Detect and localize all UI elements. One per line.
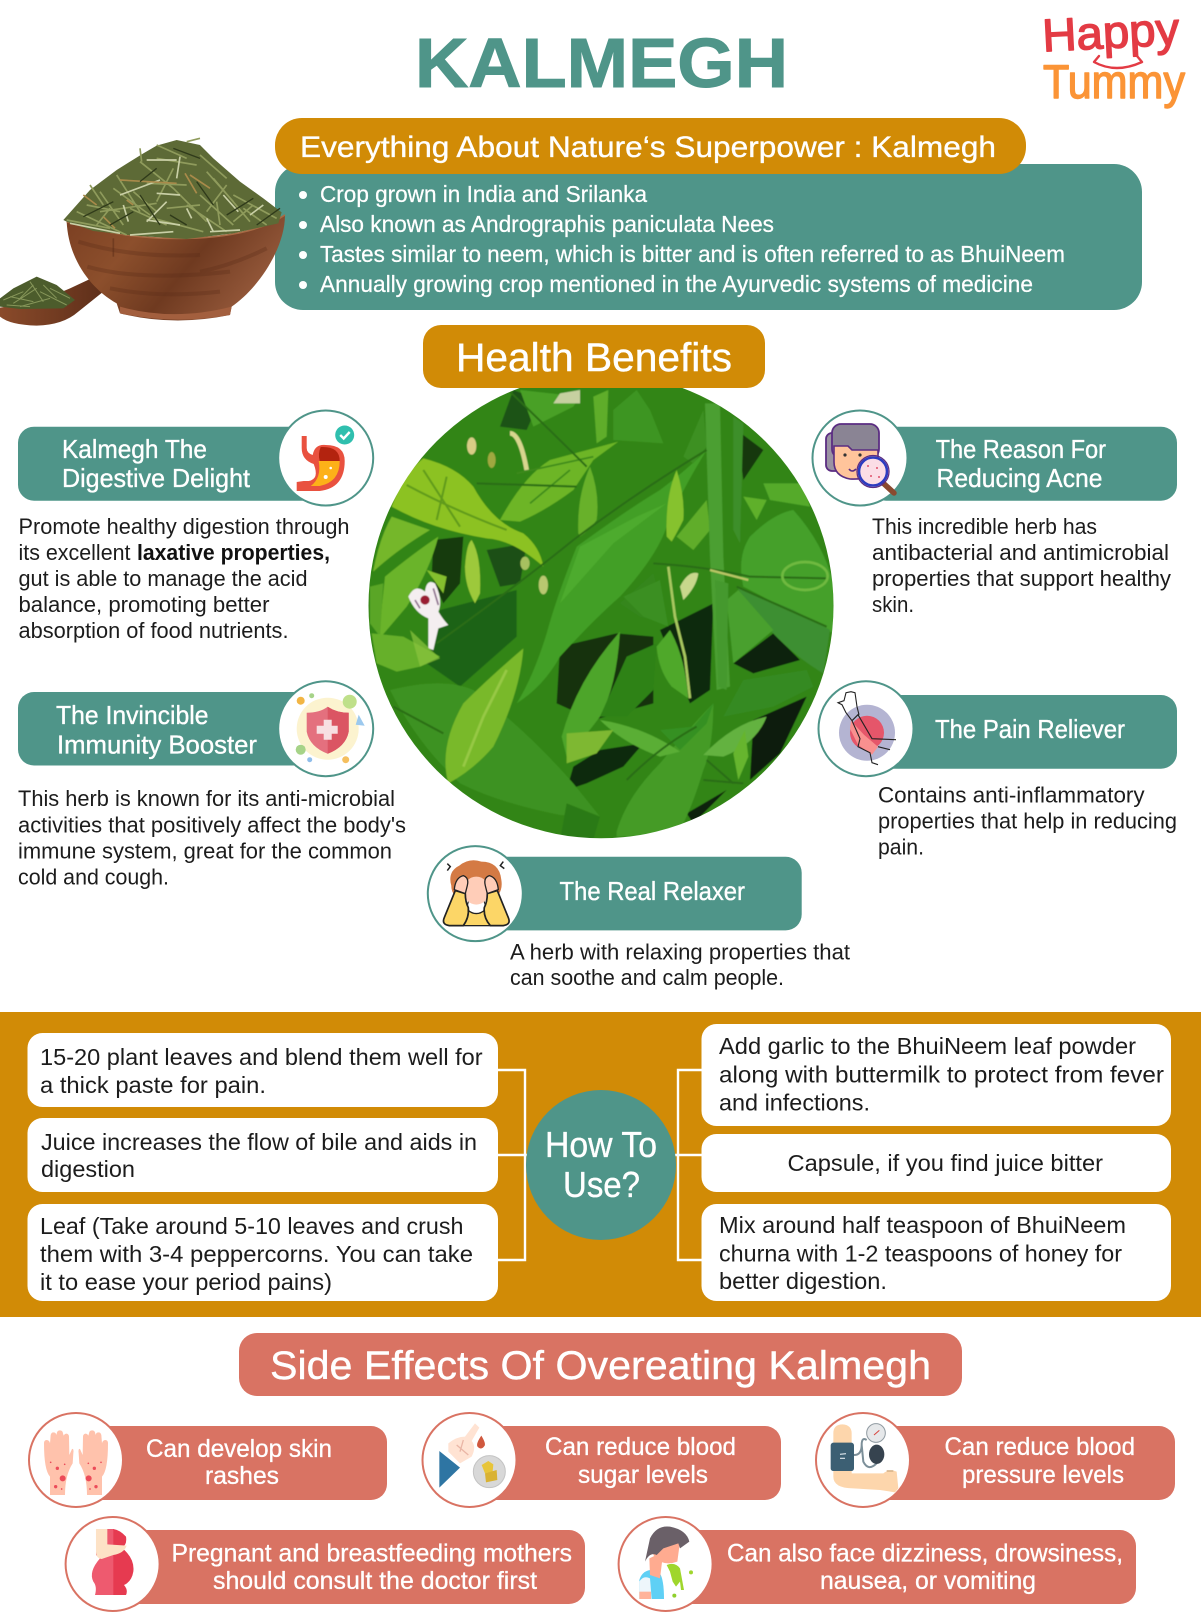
- logo: Happy Tummy: Tummy: [1043, 55, 1185, 108]
- bullet list: Also known as Andrographis paniculata Nees: [320, 211, 774, 237]
- icon: face with magnifier: [826, 424, 894, 493]
- description: properties that help in reducing: [878, 808, 1177, 834]
- description: pain.: [878, 834, 924, 860]
- label: [545, 1433, 736, 1489]
- label: [172, 1540, 572, 1595]
- icon: painful arm: [838, 692, 896, 765]
- label: [727, 1540, 1123, 1595]
- tip: leaf: Leaf (Take around 5-10 leaves and crush: [40, 1213, 464, 1239]
- panel: pregnant mothers: [66, 1517, 585, 1611]
- description: absorption of food nutrients.: [18, 618, 288, 643]
- heading: side effects: Side Effects Of Overeating Kalmegh: [270, 1344, 931, 1388]
- description: Contains anti-inflammatory: [878, 782, 1145, 807]
- tip: paste for pain: a thick paste for pain.: [40, 1072, 266, 1098]
- card heading: [62, 434, 251, 493]
- description: [18, 514, 350, 643]
- description: [878, 782, 1177, 860]
- tip: leaf: it to ease your period pains): [40, 1269, 332, 1295]
- how to use circle: How To: [545, 1124, 657, 1165]
- description: This herb is known for its anti-microbial: [18, 786, 395, 811]
- image: wooden bowl of dried kalmegh: [0, 138, 285, 326]
- card heading: The Pain Reliever: [935, 714, 1125, 744]
- label: [146, 1435, 332, 1490]
- panel: pain reliever: [818, 681, 1177, 860]
- tip: paste for pain: 15-20 plant leaves and blend them well for: [40, 1044, 483, 1070]
- label: [944, 1433, 1135, 1489]
- description: gut is able to manage the acid: [18, 566, 308, 591]
- description: balance, promoting better: [18, 592, 270, 617]
- card heading: [56, 700, 257, 759]
- panel: blood sugar: [422, 1413, 781, 1507]
- description: [510, 939, 850, 990]
- description: skin.: [872, 592, 914, 617]
- description: This incredible herb has: [872, 514, 1097, 539]
- icon: hands with rashes: [44, 1430, 108, 1495]
- label: Pregnant and breastfeeding mothers: [172, 1540, 572, 1568]
- card heading: Kalmegh The: [62, 434, 207, 464]
- tip: garlic: Add garlic to the BhuiNeem leaf powder: [719, 1033, 1136, 1059]
- card heading: Immunity Booster: [57, 729, 257, 759]
- description: activities that positively affect the body's: [18, 812, 406, 837]
- description: cold and cough.: [18, 864, 169, 890]
- panel: reducing acne: [812, 410, 1177, 617]
- label: Can develop skin: [146, 1435, 332, 1463]
- tip: juice: [28, 1118, 498, 1192]
- tip: churna: [702, 1204, 1171, 1301]
- card heading: Digestive Delight: [62, 463, 251, 493]
- icon: blood pressure cuff: [831, 1424, 898, 1492]
- description: antibacterial and antimicrobial: [872, 540, 1169, 565]
- card heading: [936, 434, 1106, 493]
- title: KALMEGH: [415, 24, 788, 102]
- label: rashes: [205, 1462, 279, 1490]
- tip: paste for pain: [28, 1033, 498, 1107]
- panel: how to use: [0, 1012, 1201, 1317]
- label: nausea, or vomiting: [820, 1567, 1036, 1595]
- panel: dizziness: [619, 1517, 1136, 1611]
- logo: Happy Tummy: Happy: [1041, 2, 1180, 61]
- description: A herb with relaxing properties that: [510, 939, 850, 964]
- description: laxative properties,: [137, 540, 330, 565]
- heading: health benefits: [423, 325, 765, 388]
- description: [18, 786, 406, 890]
- card heading: Reducing Acne: [936, 463, 1102, 493]
- card heading: The Invincible: [56, 700, 208, 730]
- panel: everything about: [275, 118, 1142, 310]
- flower: [408, 582, 448, 650]
- tip: capsule: Capsule, if you find juice bitter: [788, 1150, 1103, 1176]
- tip: capsule: [702, 1134, 1171, 1192]
- image: kalmegh plant photo: [360, 370, 840, 843]
- panel: blood pressure: [816, 1413, 1175, 1507]
- how to use circle: [526, 1090, 676, 1240]
- panel: immunity booster: [18, 681, 406, 890]
- description: Promote healthy digestion through: [18, 514, 350, 539]
- description: immune system, great for the common: [18, 838, 392, 863]
- icon: finger prick and sugar: [439, 1423, 505, 1488]
- bullet list: Annually growing crop mentioned in the Ayurvedic systems of medicine: [320, 271, 1033, 297]
- label: should consult the doctor first: [213, 1567, 537, 1595]
- card heading: The Real Relaxer: [560, 876, 745, 906]
- tip: leaf: them with 3-4 peppercorns. You can take: [40, 1241, 473, 1267]
- icon: stressed person: [443, 860, 509, 926]
- tip: garlic: and infections.: [719, 1090, 870, 1116]
- card heading: The Reason For: [936, 434, 1106, 464]
- bullet list: [299, 181, 1065, 297]
- bullet list: Tastes similar to neem, which is bitter and is often referred to as BhuiNeem: [320, 241, 1065, 267]
- panel: digestive delight: [18, 410, 373, 643]
- tip: leaf: [28, 1204, 498, 1301]
- icon: stomach: [297, 426, 354, 491]
- panel: real relaxer: [428, 846, 850, 990]
- label: sugar levels: [578, 1461, 708, 1489]
- icon: pregnant belly: [92, 1529, 134, 1595]
- description: [872, 514, 1171, 617]
- tip: juice: digestion: [41, 1156, 135, 1182]
- description: can soothe and calm people.: [510, 965, 784, 990]
- heading: side effects: [239, 1333, 962, 1396]
- label: Can also face dizziness, drowsiness,: [727, 1540, 1123, 1568]
- panel: skin rashes: [29, 1413, 387, 1507]
- icon: shield: [296, 693, 365, 763]
- icon: vomiting person: [639, 1526, 693, 1599]
- label: Can reduce blood: [944, 1433, 1135, 1461]
- description: its excellent: [18, 540, 130, 565]
- logo: Happy Tummy: [1041, 2, 1185, 108]
- label: pressure levels: [962, 1461, 1124, 1489]
- heading: everything about nature's superpower: Everything About Nature‘s Superpower : Kalmegh: [300, 131, 996, 164]
- label: Can reduce blood: [545, 1433, 736, 1461]
- tip: churna: Mix around half teaspoon of BhuiNeem: [719, 1212, 1126, 1238]
- heading: health benefits: Health Benefits: [456, 336, 732, 380]
- tip: juice: Juice increases the flow of bile and aids in: [41, 1129, 477, 1155]
- tip: garlic: [702, 1024, 1171, 1126]
- how to use circle: Use?: [563, 1164, 640, 1205]
- tip: churna: churna with 1-2 teaspoons of honey for: [719, 1240, 1122, 1266]
- description: properties that support healthy: [872, 566, 1171, 591]
- tip: churna: better digestion.: [719, 1268, 887, 1294]
- tip: garlic: along with buttermilk to protect from fever: [719, 1062, 1164, 1088]
- bullet list: Crop grown in India and Srilanka: [320, 181, 647, 207]
